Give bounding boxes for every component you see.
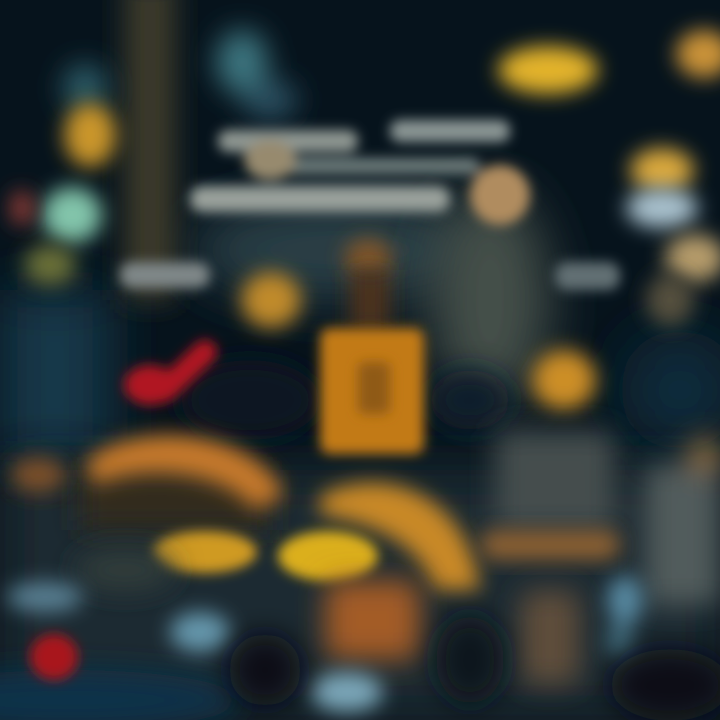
teal glow upper left (63, 30, 298, 120)
red check mark (124, 352, 205, 405)
right orange dot (532, 350, 596, 410)
yellow blobs (153, 531, 378, 581)
blurred side labels (120, 262, 620, 290)
food arc (10, 435, 620, 590)
dark pillar (125, 0, 175, 300)
right glass (495, 430, 720, 605)
blurred title lines (190, 120, 530, 225)
blue highlights (7, 576, 643, 712)
left lights (10, 103, 116, 285)
upper right lights (498, 30, 720, 326)
red dot (30, 634, 78, 680)
bottle (320, 238, 424, 454)
bottom shadows (229, 616, 720, 720)
orange dot (241, 272, 301, 328)
lower food (75, 550, 580, 685)
